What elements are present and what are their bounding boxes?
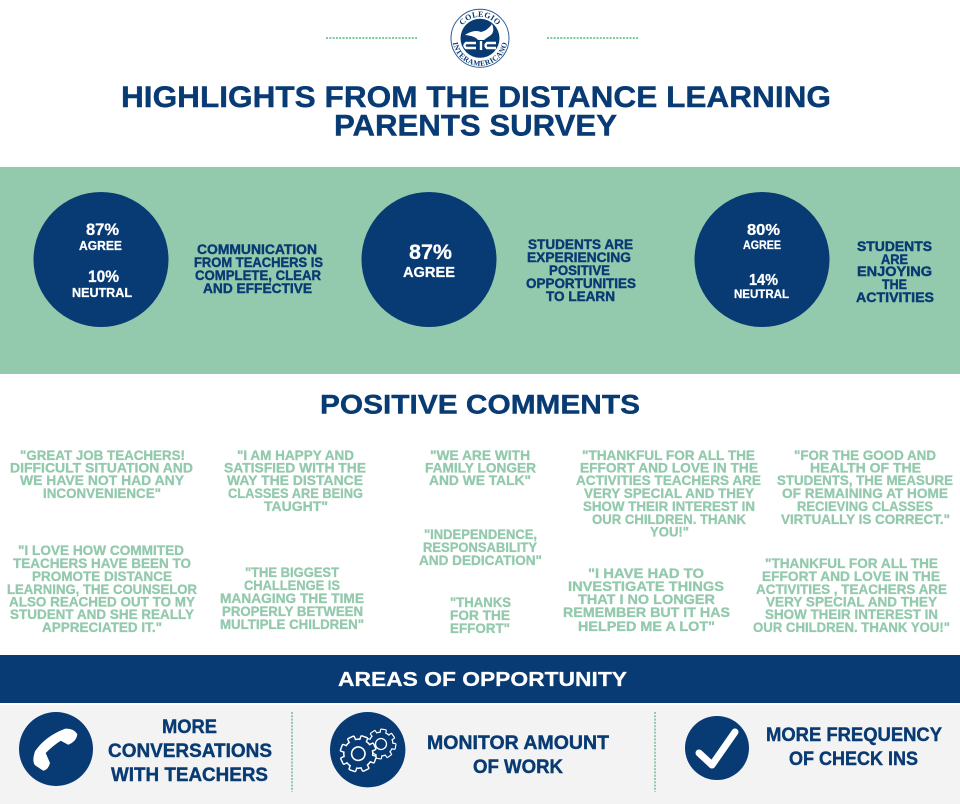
stat circle: communication: NEUTRAL: [72, 286, 132, 300]
comment: thankful, teachers are special: OUR CHILDREN. THANK YOU!": [753, 620, 950, 635]
comment: happy and satisfied: CLASSES ARE BEING: [228, 486, 363, 501]
comment: independence: "INDEPENDENCE,: [424, 527, 537, 542]
comment: thanks for the effort: FOR THE: [450, 608, 510, 623]
comment: biggest challenge: MANAGING THE TIME: [220, 591, 364, 606]
comment: biggest challenge: [220, 565, 364, 632]
statement: opportunities: [526, 237, 636, 304]
comment: great job teachers: [10, 448, 193, 501]
logo: Colegio Interamericano: INTERAMERICANO: [452, 42, 507, 66]
panel: survey results: [0, 167, 960, 374]
comment: committed teachers: [7, 543, 197, 635]
comment: thankful, teachers are special: VERY SPECIAL AND THEY: [766, 594, 937, 610]
comment: investigate things: INVESTIGATE THINGS: [568, 579, 724, 594]
stat circle: communication: [34, 192, 168, 327]
comment: thankful for effort and love: ACTIVITIES TEACHERS ARE: [576, 473, 761, 488]
comment: happy and satisfied: "I AM HAPPY AND: [237, 448, 354, 463]
comment: investigate things: HELPED ME A LOT": [578, 619, 715, 634]
comment: good and health: "FOR THE GOOD AND: [794, 448, 936, 463]
comment: with family longer: "WE ARE WITH: [430, 448, 530, 463]
icon: check mark: [685, 716, 749, 780]
statement: communication: COMPLETE, CLEAR: [195, 268, 321, 283]
comment: investigate things: "I HAVE HAD TO: [588, 566, 704, 581]
title: [121, 81, 831, 142]
icon: gears: [330, 712, 405, 787]
comment: with family longer: FAMILY LONGER: [425, 460, 536, 476]
comment: thankful for effort and love: YOU!": [650, 524, 689, 540]
banner: areas of opportunity: AREAS OF OPPORTUNITY: [338, 668, 627, 691]
comment: investigate things: REMEMBER BUT IT HAS: [563, 605, 730, 620]
stat circle: communication: 10%: [88, 267, 119, 286]
stat circle: opportunities: 87%: [409, 241, 452, 264]
statement: opportunities: OPPORTUNITIES: [526, 276, 636, 291]
statement: enjoyment: STUDENTS: [857, 239, 932, 254]
text: more frequency of check ins: [766, 725, 942, 770]
comment: independence: [419, 527, 542, 568]
logo: Colegio Interamericano: COLEGIO: [460, 12, 500, 24]
comment: thanks for the effort: EFFORT": [450, 621, 510, 636]
comment: thankful for effort and love: OUR CHILDREN. THANK: [592, 512, 746, 527]
comment: happy and satisfied: TAUGHT": [264, 499, 328, 514]
comment: thankful for effort and love: VERY SPECIAL AND THEY: [584, 486, 754, 501]
comment: great job teachers: "GREAT JOB TEACHERS!: [20, 448, 185, 463]
statement: communication: FROM TEACHERS IS: [194, 255, 323, 270]
text: more conversations: WITH TEACHERS: [111, 765, 268, 786]
comment: with family longer: [425, 448, 536, 488]
comment: committed teachers: "I LOVE HOW COMMITED: [18, 543, 184, 558]
statement: communication: AND EFFECTIVE: [203, 281, 312, 296]
comment: biggest challenge: MULTIPLE CHILDREN": [220, 617, 364, 632]
stat circle: communication: AGREE: [79, 239, 122, 253]
comment: investigate things: THAT I NO LONGER: [578, 592, 715, 607]
text: more conversations: MORE: [162, 717, 217, 738]
stat circle: enjoyment: AGREE: [743, 240, 781, 252]
comment: committed teachers: TEACHERS HAVE BEEN TO: [13, 556, 191, 571]
statement: opportunities: TO LEARN: [546, 289, 615, 304]
stat circle: enjoyment: 80%: [747, 222, 780, 239]
statement: opportunities: POSITIVE: [549, 263, 610, 278]
statement: enjoyment: [856, 239, 934, 305]
text: more frequency of check ins: MORE FREQUENCY: [766, 725, 942, 746]
text: monitor amount of work: OF WORK: [473, 757, 563, 778]
text: monitor amount of work: [427, 733, 609, 778]
text: more conversations: [108, 717, 272, 786]
comment: good and health: VIRTUALLY IS CORRECT.": [781, 512, 950, 527]
comment: good and health: STUDENTS, THE MEASURE: [777, 473, 953, 488]
stat circle: enjoyment: [694, 192, 830, 327]
comment: thankful, teachers are special: "THANKFUL FOR ALL THE: [765, 556, 938, 571]
panel: opportunities: [0, 705, 960, 804]
comment: with family longer: AND WE TALK": [429, 473, 531, 488]
text: more frequency of check ins: OF CHECK INS: [789, 749, 918, 770]
statement: enjoyment: ACTIVITIES: [856, 290, 934, 305]
comment: thanks for the effort: "THANKS: [450, 595, 511, 610]
comment: committed teachers: ALSO REACHED OUT TO MY: [9, 594, 195, 610]
banner: areas of opportunity: [0, 655, 960, 703]
comment: thankful, teachers are special: ACTIVITIES , TEACHERS ARE: [756, 582, 947, 597]
comment: happy and satisfied: [224, 448, 366, 514]
text: monitor amount of work: MONITOR AMOUNT: [427, 733, 609, 754]
comment: independence: RESPONSABILITY: [423, 540, 537, 555]
comment: biggest challenge: "THE BIGGEST: [245, 565, 340, 580]
comment: good and health: OF REMAINING AT HOME: [782, 486, 948, 501]
comment: thankful for effort and love: [576, 448, 761, 540]
comment: happy and satisfied: SATISFIED WITH THE: [224, 460, 366, 476]
comment: thankful, teachers are special: EFFORT AND LOVE IN THE: [762, 569, 940, 584]
statement: opportunities: STUDENTS ARE: [528, 237, 633, 252]
comment: great job teachers: WE HAVE NOT HAD ANY: [20, 473, 184, 488]
comment: committed teachers: APPRECIATED IT.": [42, 620, 162, 635]
comment: thankful, teachers are special: [753, 556, 950, 635]
comment: great job teachers: DIFFICULT SITUATION AND: [10, 460, 193, 476]
statement: enjoyment: ENJOYING: [857, 264, 932, 279]
comment: thanks for the effort: [450, 595, 511, 636]
comment: great job teachers: INCONVENIENCE": [43, 486, 161, 501]
heading: positive comments: POSITIVE COMMENTS: [320, 390, 640, 420]
comment: biggest challenge: PROPERLY BETWEEN: [222, 604, 363, 619]
comment: biggest challenge: CHALLENGE IS: [244, 578, 340, 593]
comment: committed teachers: STUDENT AND SHE REALLY: [10, 607, 194, 622]
comment: committed teachers: PROMOTE DISTANCE: [32, 569, 172, 584]
comment: committed teachers: LEARNING, THE COUNSELOR: [7, 582, 197, 597]
comment: thankful, teachers are special: SHOW THEIR INTEREST IN: [765, 607, 938, 622]
stat circle: communication: 87%: [86, 220, 119, 239]
comment: independence: AND DEDICATION": [419, 553, 542, 568]
statement: communication: COMMUNICATION: [197, 242, 317, 257]
comment: thankful for effort and love: EFFORT AND LOVE IN THE: [580, 460, 758, 476]
statement: opportunities: EXPERIENCING: [527, 250, 631, 265]
comment: thankful for effort and love: "THANKFUL FOR ALL THE: [582, 448, 755, 463]
title: HIGHLIGHTS FROM THE DISTANCE LEARNING: [121, 81, 831, 114]
comment: thankful for effort and love: SHOW THEIR INTEREST IN: [583, 499, 755, 514]
stat circle: enjoyment: 14%: [749, 272, 778, 289]
comment: good and health: HEALTH OF THE: [810, 460, 921, 476]
comment: investigate things: [563, 566, 730, 634]
text: more conversations: CONVERSATIONS: [108, 741, 272, 762]
title: PARENTS SURVEY: [334, 110, 617, 142]
statement: communication: [194, 242, 323, 296]
comment: good and health: RECIEVING CLASSES: [797, 499, 933, 514]
comment: happy and satisfied: WAY THE DISTANCE: [227, 473, 363, 488]
statement: enjoyment: THE: [882, 277, 907, 292]
stat circle: enjoyment: NEUTRAL: [734, 289, 789, 301]
comment: good and health: [777, 448, 953, 527]
stat circle: opportunities: [362, 192, 496, 327]
statement: enjoyment: ARE: [881, 252, 908, 267]
icon: telephone: [19, 712, 93, 786]
logo: Colegio Interamericano: [450, 8, 510, 68]
stat circle: opportunities: AGREE: [403, 264, 455, 281]
